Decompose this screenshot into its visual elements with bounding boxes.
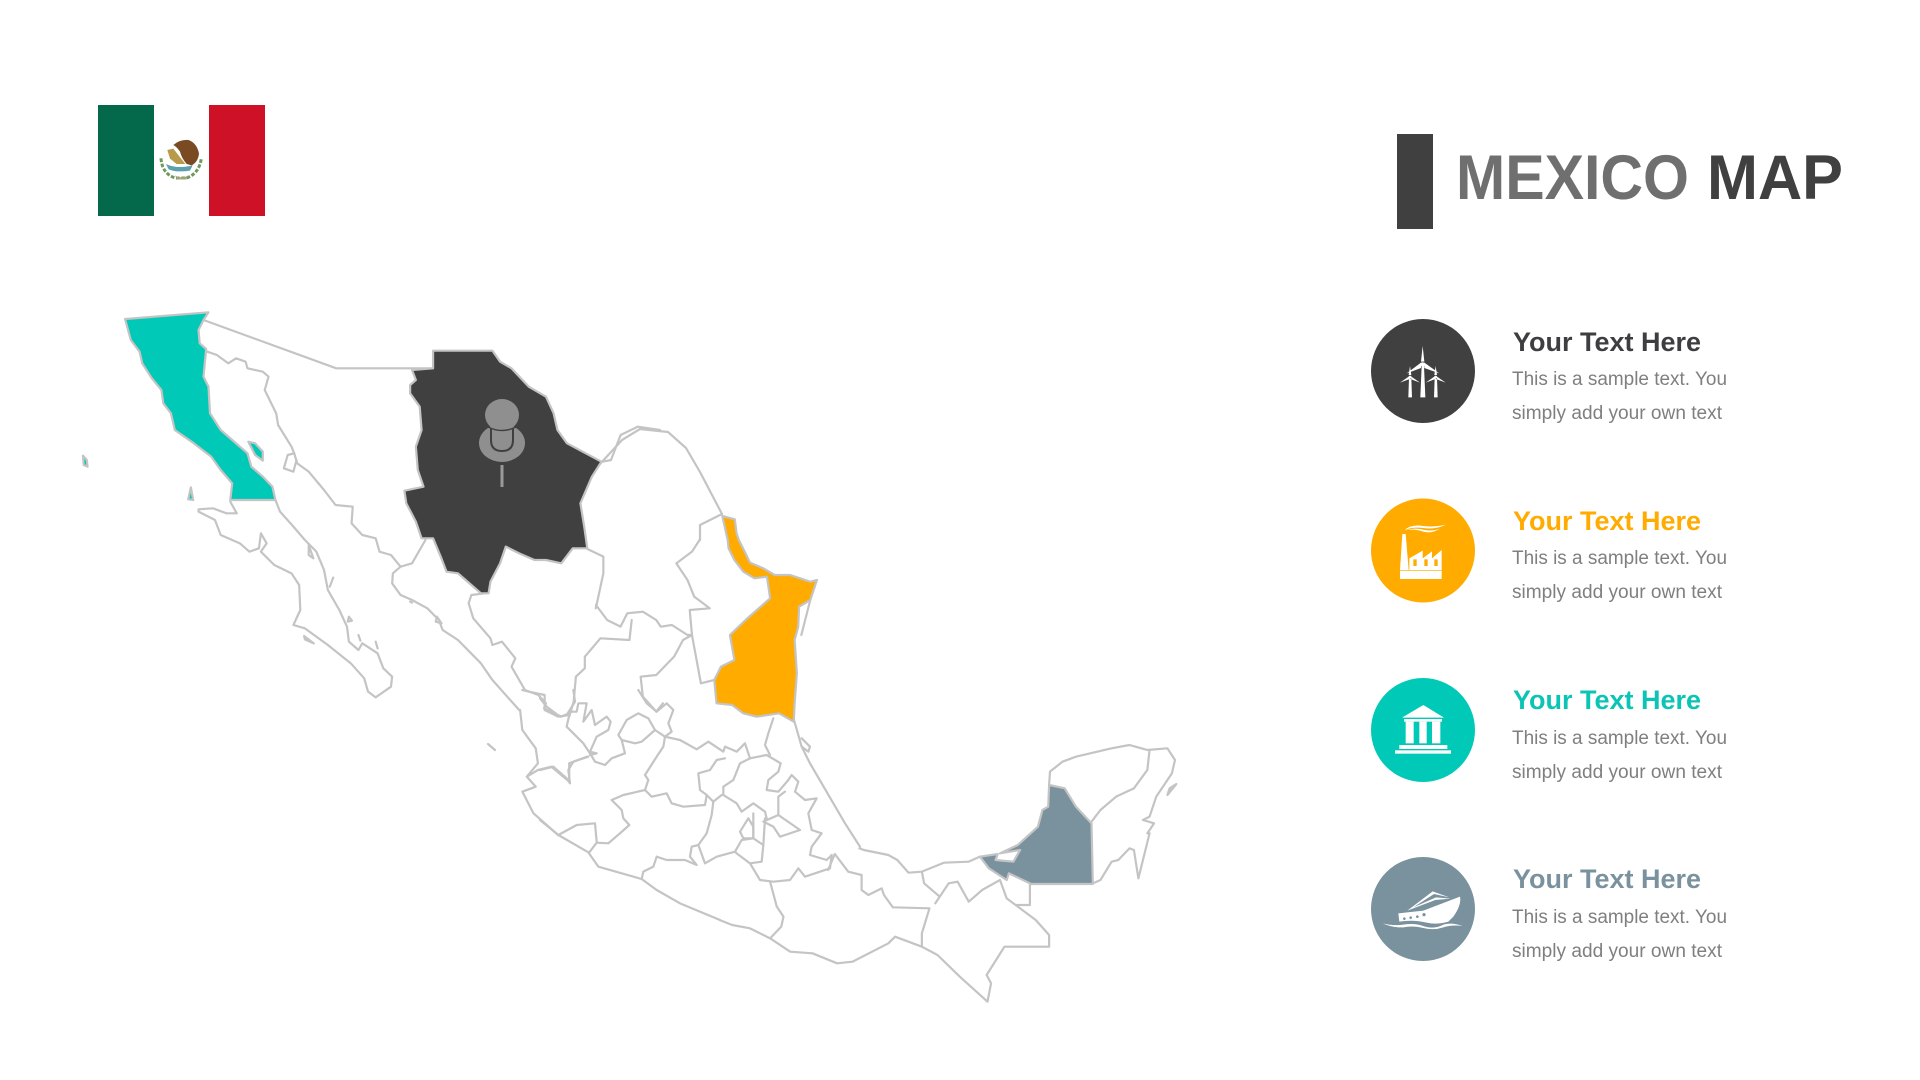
- body text: simply add your own text: [1512, 403, 1723, 424]
- heading: Your Text Here: [1513, 506, 1701, 536]
- heading: Your Text Here: [1513, 864, 1701, 894]
- icon: flag of Mexico: [98, 105, 265, 216]
- icon: map pin: [479, 399, 525, 487]
- state: Baja California (teal): [83, 312, 275, 500]
- map: Coahuila and Nuevo Leon outlines: [600, 429, 722, 540]
- heading: Your Text Here: [1513, 327, 1701, 357]
- body text: simply add your own text: [1512, 582, 1723, 603]
- item 3: government: [1371, 678, 1727, 783]
- icon: factory: [1371, 498, 1475, 602]
- heading: Your Text Here: [1513, 685, 1701, 715]
- map: southern and Yucatan outlines: [520, 540, 1176, 1002]
- map: northern state outlines: [199, 320, 660, 717]
- map: central state outlines: [540, 690, 860, 920]
- body text: This is a sample text. You: [1512, 369, 1727, 390]
- state: Tamaulipas (orange): [714, 516, 817, 722]
- body text: simply add your own text: [1512, 941, 1723, 962]
- state: Chihuahua (dark): [404, 351, 601, 593]
- icon: wind turbines: [1371, 319, 1475, 423]
- body text: [1512, 728, 1727, 783]
- body text: This is a sample text. You: [1512, 728, 1727, 749]
- body text: [1512, 907, 1727, 962]
- body text: [1512, 548, 1727, 603]
- title bar: [1397, 134, 1433, 229]
- icon: ship: [1371, 857, 1475, 961]
- body text: simply add your own text: [1512, 762, 1723, 783]
- map: small island: [488, 744, 495, 750]
- item 1: wind energy: [1371, 319, 1727, 424]
- title: [1456, 143, 1843, 213]
- state: Campeche (slate): [980, 785, 1093, 884]
- body text: [1512, 369, 1727, 424]
- icon: classical building: [1371, 678, 1475, 782]
- item 2: factory: [1371, 498, 1727, 603]
- title: MEXICO: [1456, 143, 1689, 213]
- body text: This is a sample text. You: [1512, 548, 1727, 569]
- map of Mexico: [83, 312, 1176, 1002]
- body text: This is a sample text. You: [1512, 907, 1727, 928]
- item 4: shipping: [1371, 857, 1727, 962]
- title: MAP: [1707, 143, 1843, 213]
